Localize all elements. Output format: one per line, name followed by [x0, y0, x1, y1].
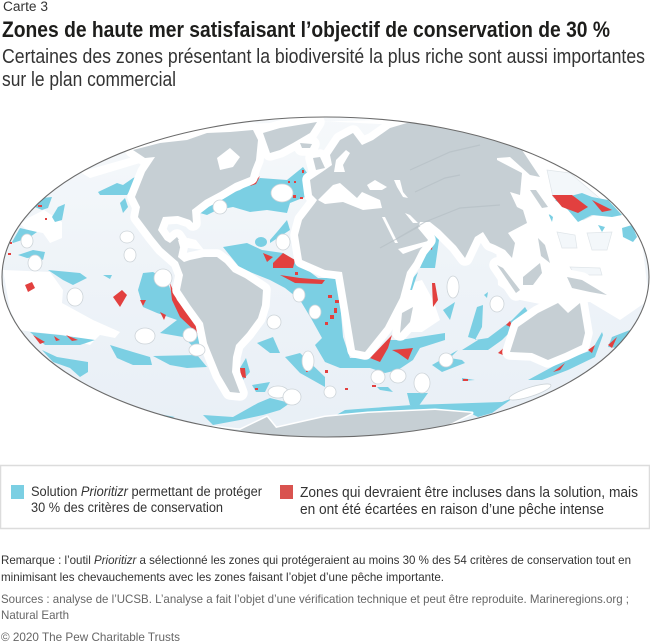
sources: Natural Earth	[1, 608, 69, 622]
legend item: red zones: en ont été écartées en raison d’une pêche intense	[300, 501, 604, 518]
legend item: blue zones	[11, 484, 262, 515]
legend item: red zones	[280, 484, 638, 518]
blue zones: Prioritizr solution	[12, 167, 637, 425]
legend item: blue zones: 30 % des critères de conservation	[31, 500, 223, 515]
legend box	[0, 466, 650, 528]
sources	[1, 592, 629, 622]
subtitle: sur le plan commercial	[2, 69, 176, 91]
high-seas pockets and island buffers	[21, 184, 552, 405]
inland seas	[178, 148, 430, 254]
note	[1, 553, 631, 584]
mountain shading	[380, 145, 500, 248]
note: minimisant les chevauchements avec les zones faisant l’objet d’une pêche importante.	[1, 570, 444, 584]
map outline	[2, 117, 649, 437]
red zones: excluded for intense fishing	[8, 170, 617, 390]
world map	[0, 110, 650, 445]
subtitle	[2, 46, 645, 91]
legend item: blue zones: Solution Prioritizr permettant de protéger	[31, 484, 262, 499]
land buffer	[133, 122, 607, 393]
note: Remarque : l’outil Prioritizr a sélectionné les zones qui protégeraient au moins 30 % des 54 critères de conservation tout en	[1, 553, 631, 567]
land masses	[133, 122, 607, 393]
sources: Sources : analyse de l’UCSB. L’analyse a fait l’objet d’une vérification technique et peut être reproduite. Marineregions.org ;	[1, 592, 629, 606]
